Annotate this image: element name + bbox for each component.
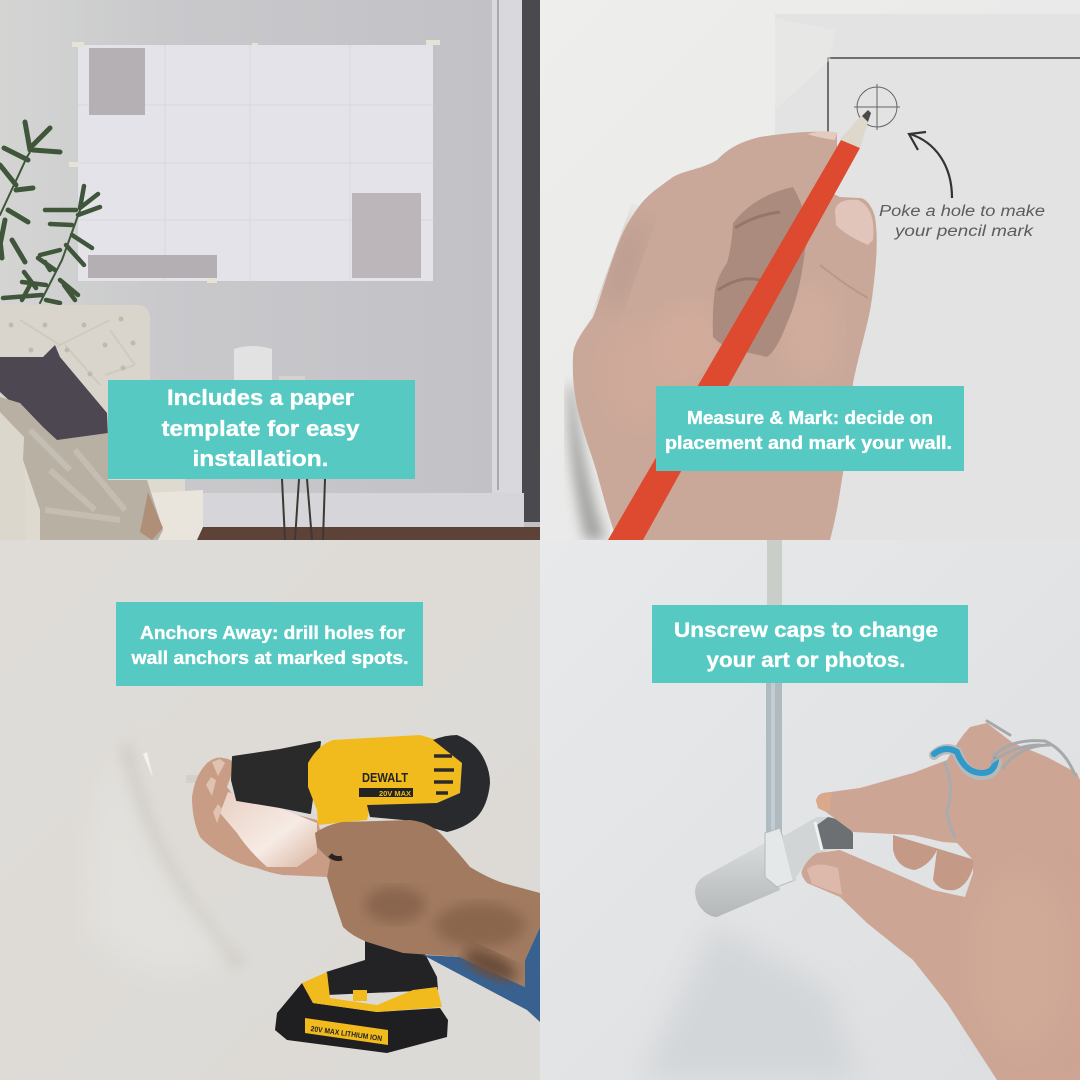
handwritten note <box>879 203 1045 240</box>
hidden fingers <box>893 835 975 890</box>
drill body: 20V MAX <box>379 789 411 798</box>
handwritten note: Poke a hole to make <box>879 203 1045 220</box>
caption box <box>116 602 423 686</box>
panel: anchors away <box>0 540 540 1080</box>
vase and side table <box>234 346 325 540</box>
caption box: installation. <box>192 446 328 471</box>
hand shadow <box>568 380 606 540</box>
wall crease <box>90 745 240 973</box>
caption box: Unscrew caps to change <box>674 618 938 642</box>
caption box: your art or photos. <box>706 648 906 672</box>
hand holding pencil <box>573 131 877 540</box>
gripping hand and arm <box>315 820 540 988</box>
shirt sleeve <box>423 927 540 1022</box>
caption box: Includes a paper <box>167 385 354 410</box>
caption box: Anchors Away: drill holes for <box>140 623 405 643</box>
caption box: wall anchors at marked spots. <box>130 648 408 668</box>
panel: unscrew caps <box>540 540 1080 1080</box>
door frame <box>150 0 540 540</box>
curved arrow <box>909 132 952 198</box>
caption box: template for easy <box>162 416 360 441</box>
panel: measure and mark <box>540 0 1080 540</box>
drill body <box>232 735 490 832</box>
caption box <box>652 605 968 683</box>
drill handle <box>326 935 438 995</box>
acrylic edge <box>766 540 782 833</box>
battery <box>275 972 448 1053</box>
open palm hand <box>192 758 330 877</box>
metal standoff <box>695 817 853 917</box>
knit throw <box>0 397 163 540</box>
dark cushion <box>0 345 108 442</box>
handwritten note: your pencil mark <box>894 223 1035 240</box>
battery: 20V MAX LITHIUM ION <box>310 1024 383 1043</box>
drill bit <box>186 775 198 783</box>
drill body: DEWALT <box>362 771 408 785</box>
crosshair target <box>854 84 900 130</box>
armchair <box>0 305 203 540</box>
translucent template sheet <box>735 14 1080 540</box>
plant <box>0 122 100 303</box>
caption box <box>656 386 964 471</box>
hand with fingers <box>802 723 1080 1080</box>
shadow on wall <box>640 925 860 1080</box>
panel: paper template on wall <box>0 0 540 540</box>
rings <box>934 721 1075 837</box>
paper template <box>69 40 440 283</box>
red pencil <box>608 110 871 540</box>
caption box: placement and mark your wall. <box>665 433 952 453</box>
caption box: Measure & Mark: decide on <box>687 408 933 428</box>
caption box <box>108 380 415 479</box>
